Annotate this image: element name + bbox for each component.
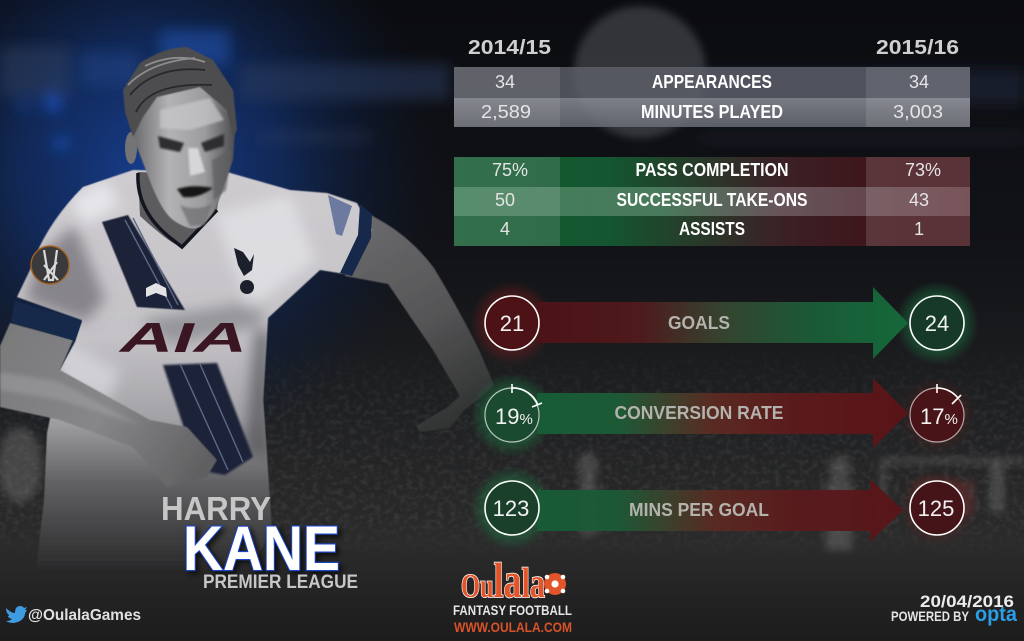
powered by opta: [891, 603, 1017, 626]
row: pass completion: 75%: [492, 160, 528, 180]
right value: 17% gauge: 17%: [920, 404, 958, 429]
arrow: mins per goal: [537, 479, 903, 542]
oulala logo: [453, 552, 572, 635]
europa league badge: [31, 246, 69, 284]
arm shading: [0, 372, 140, 425]
label: conversion rate: CONVERSION RATE: [614, 403, 784, 423]
uefa sleeve patch: [328, 195, 352, 236]
website: WWW.OULALA.COM: [454, 620, 572, 635]
table: usage stats: [454, 67, 970, 127]
shirt: [17, 170, 372, 570]
row: pass completion: [492, 160, 941, 180]
face: [133, 82, 235, 228]
table: passing and creativity: [454, 157, 970, 246]
row: successful take-ons: [495, 190, 929, 210]
facial features: [158, 98, 232, 226]
shirt collar: [138, 173, 217, 247]
twitter handle: @OulalaGames: [28, 607, 141, 624]
label: mins per goal: MINS PER GOAL: [629, 500, 769, 520]
icon: football: [544, 573, 566, 595]
left value: 19% gauge: 19%: [495, 404, 533, 429]
sleeve bands: [11, 204, 372, 341]
tagline: FANTASY FOOTBALL: [453, 603, 572, 618]
left value: 21: 21: [500, 311, 524, 336]
blurred players: [0, 427, 1024, 550]
powered by opta: POWERED BY: [891, 608, 970, 624]
shirt shading: [25, 180, 315, 460]
left value: 19% gauge: [485, 384, 542, 442]
right value: 125: [910, 481, 964, 535]
left value: 123: [485, 481, 539, 535]
hair strands: [128, 58, 212, 112]
logo wordmark: Oulala: [461, 552, 545, 608]
row: assists: 1: [914, 219, 924, 239]
arrow: conversion rate: [537, 378, 908, 448]
player photo: Harry Kane: [0, 47, 494, 570]
left value: 21: [485, 296, 539, 350]
AIA sponsor: AIA: [118, 314, 247, 361]
column header: 2015/16: 2015/16: [876, 37, 959, 59]
blurred stand band: [0, 30, 1024, 150]
right value: 24: [910, 296, 964, 350]
comparison: conversion rate: [470, 373, 975, 457]
first name: HARRY: [161, 490, 271, 527]
crowd texture: [0, 378, 1024, 536]
row: assists: ASSISTS: [679, 219, 745, 239]
row: appearances: APPEARANCES: [652, 72, 772, 92]
blurred ball: [574, 6, 706, 138]
player name: [161, 490, 358, 593]
hair: [123, 47, 237, 137]
row: appearances: [495, 72, 929, 92]
right arm: [345, 208, 494, 432]
date: 20/04/2016: [920, 593, 1014, 611]
under armour logo: [146, 283, 167, 297]
row: assists: 4: [500, 219, 510, 239]
powered by opta: opta: [975, 603, 1017, 626]
left arm and hand: [0, 323, 217, 487]
comparison: goals: [470, 281, 979, 365]
club crest: [234, 248, 254, 294]
surname: KANE: [183, 514, 340, 584]
row: minutes played: 2,589: [481, 102, 531, 122]
shirt stripes: [102, 215, 253, 475]
row: pass completion: PASS COMPLETION: [636, 160, 788, 180]
neck: [138, 172, 222, 246]
row: minutes played: MINUTES PLAYED: [641, 102, 783, 122]
label: goals: GOALS: [668, 313, 730, 333]
row: minutes played: [481, 102, 943, 122]
row: appearances: 34: [495, 72, 515, 92]
left value: 123: 123: [493, 496, 529, 521]
row: assists: [500, 219, 924, 239]
competition: PREMIER LEAGUE: [203, 571, 358, 593]
row: successful take-ons: 50: [495, 190, 515, 210]
right value: 125: 125: [918, 496, 954, 521]
column header: 2014/15: 2014/15: [468, 37, 551, 59]
comparison: mins per goal: [470, 466, 975, 550]
arrow: goals: [537, 287, 908, 359]
row: appearances: 34: [909, 72, 929, 92]
icon: twitter bird: [6, 606, 27, 623]
ear: [125, 132, 137, 164]
row: minutes played: 3,003: [893, 102, 943, 122]
right value: 17% gauge: [910, 384, 964, 442]
row: successful take-ons: 43: [909, 190, 929, 210]
right value: 24: 24: [925, 311, 949, 336]
row: successful take-ons: SUCCESSFUL TAKE-ONS: [616, 190, 808, 210]
row: pass completion: 73%: [905, 160, 941, 180]
